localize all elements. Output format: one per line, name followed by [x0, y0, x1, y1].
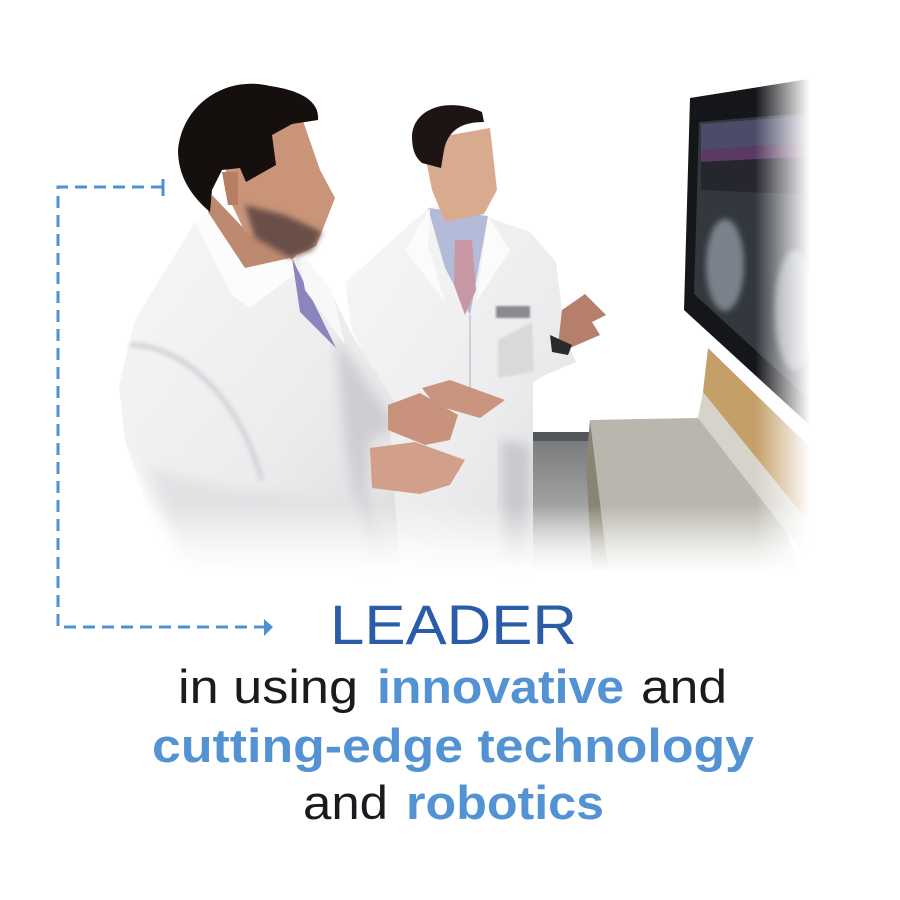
bottom fade of photo	[100, 505, 830, 573]
heading: LEADER: LEADER	[330, 593, 577, 656]
head	[422, 128, 497, 222]
hands	[388, 393, 458, 445]
hand and watch	[558, 294, 606, 348]
text block: description: in using	[178, 660, 358, 713]
left fade of coat	[95, 450, 190, 580]
text block: description	[152, 660, 754, 829]
text block: description: innovative	[377, 660, 624, 713]
doctor right	[345, 105, 606, 570]
wall base and counter	[531, 348, 815, 570]
doctor left	[119, 84, 465, 570]
dashed connector arrow	[58, 179, 273, 636]
text block: description: robotics	[406, 776, 604, 829]
neck	[205, 195, 296, 290]
coat	[119, 222, 400, 570]
collar	[195, 212, 300, 308]
text block: description: and	[641, 660, 727, 713]
text block: description: cutting-edge technology	[152, 719, 754, 772]
shirt and tie	[428, 208, 488, 315]
photo: two doctors viewing a scan monitor	[95, 60, 849, 580]
text block: description: and	[303, 776, 388, 829]
head	[225, 118, 335, 258]
coat	[345, 206, 576, 570]
monitor showing brain scan	[684, 60, 849, 580]
